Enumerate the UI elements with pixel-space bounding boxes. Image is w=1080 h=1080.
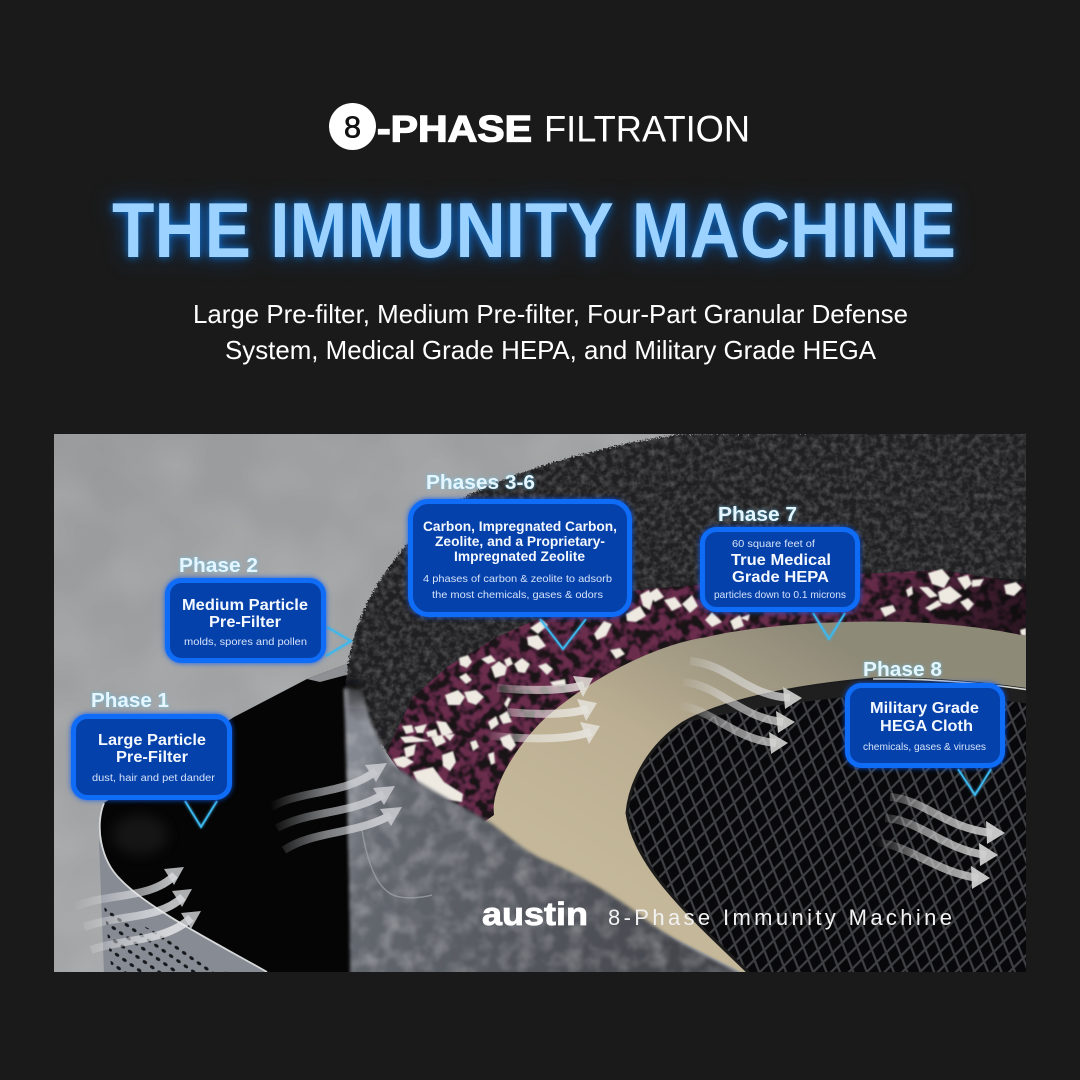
text: phase 2 details: Pre-Filter [209, 614, 281, 631]
brand line: austin [482, 896, 588, 932]
icon: circled 8 [329, 103, 376, 150]
label: phase 2: Phase 2 [179, 555, 258, 577]
pointer: phase 1 [185, 801, 217, 827]
text: phase 7 details: True Medical [731, 552, 831, 569]
airflow arrows: phase 1 [74, 867, 201, 950]
dark felt outer ring [346, 430, 1030, 790]
pointer: phase 7 [813, 613, 845, 639]
text: phase 2 details: Medium Particle [182, 597, 308, 614]
wall background [54, 434, 806, 972]
beige filter end cap ring [480, 622, 1030, 974]
label: phase 7: Phase 7 [718, 504, 797, 526]
felt strip shadow at top [346, 678, 369, 722]
text: phase 8 details: chemicals, gases & viruses [863, 741, 986, 753]
box: phases 3-6 [410, 502, 630, 614]
front grey felt pre-filter [344, 688, 745, 976]
granular media band [386, 568, 1026, 822]
text: phases 3-6 details: the most chemicals, gases & odors [432, 589, 603, 601]
text: phases 3-6 details: Carbon, Impregnated Carbon, [423, 519, 617, 534]
box: phase 8 [848, 686, 1002, 766]
brand line [482, 901, 951, 930]
callout: phase 7 [702, 504, 858, 639]
text: phases 3-6 details: Zeolite, and a Proprietary- [435, 534, 605, 549]
outer housing perforated body [99, 840, 270, 974]
pointer: phase 8 [958, 769, 991, 795]
callout: phases 3-6 [410, 472, 630, 649]
text: phase 7 details: particles down to 0.1 microns [714, 589, 846, 601]
heading: -PHASE: -PHASE [377, 108, 532, 150]
white zeolite stones [393, 569, 1026, 802]
box: phase 7 [702, 530, 858, 610]
text: phase 1 details: Large Particle [98, 732, 206, 749]
text: phase 7 details [714, 538, 846, 601]
box: phase 1 [74, 716, 230, 798]
text: phase 8 details: Military Grade [870, 700, 979, 717]
text: phases 3-6 details: Impregnated Zeolite [454, 549, 585, 564]
label: phases 3-6: Phases 3-6 [426, 472, 535, 494]
airflow arrows: HEGA phase [875, 797, 1005, 889]
HEGA mesh core [627, 679, 1030, 974]
callout: phase 1 [74, 690, 230, 827]
airflow arrows: phase 2 [271, 763, 402, 850]
airflow arrows: HEPA phase [677, 661, 802, 754]
text: phase 7 details: 60 square feet of [732, 538, 815, 550]
text: phases 3-6 details [423, 519, 617, 601]
subtitle: System, Medical Grade HEPA, and Military Grade HEGA [225, 335, 877, 365]
airflow arrows: granular phases [483, 676, 600, 744]
metal rim at hole top [683, 679, 1030, 723]
brand line: 8-Phase Immunity Machine [608, 905, 952, 930]
felt stray fibre [362, 830, 432, 898]
text: phase 1 details: dust, hair and pet dander [92, 772, 216, 784]
title: THE IMMUNITY MACHINE [112, 186, 956, 274]
text: phase 2 details [182, 597, 308, 648]
subtitle [193, 299, 908, 365]
callout: phase 2 [168, 555, 351, 660]
text: phase 2 details: molds, spores and pollen [184, 636, 307, 648]
text: phase 1 details [92, 732, 216, 784]
pointer: phase 2 [326, 627, 351, 656]
box: phase 2 [168, 580, 324, 660]
text: phase 8 details: HEGA Cloth [880, 718, 973, 735]
text: phase 1 details: Pre-Filter [116, 749, 188, 766]
text: phase 7 details: Grade HEPA [732, 569, 829, 586]
text: phases 3-6 details: 4 phases of carbon & zeolite to adsorb [423, 573, 612, 585]
pointer: phases 3-6 [540, 619, 586, 649]
subtitle: Large Pre-filter, Medium Pre-filter, Four-Part Granular Defense [193, 299, 908, 329]
text: phase 8 details [863, 700, 986, 753]
icon: circled 8: 8 [344, 110, 361, 144]
panel: filter cutaway photo illustration [54, 430, 1030, 976]
header: 8-phase filtration [329, 103, 750, 150]
outer housing interior [100, 660, 380, 974]
label: phase 8: Phase 8 [863, 659, 942, 681]
housing rim highlight [100, 803, 267, 972]
callout: phase 8 [848, 659, 1002, 795]
label: phase 1: Phase 1 [91, 690, 169, 712]
heading: FILTRATION: FILTRATION [544, 108, 750, 150]
